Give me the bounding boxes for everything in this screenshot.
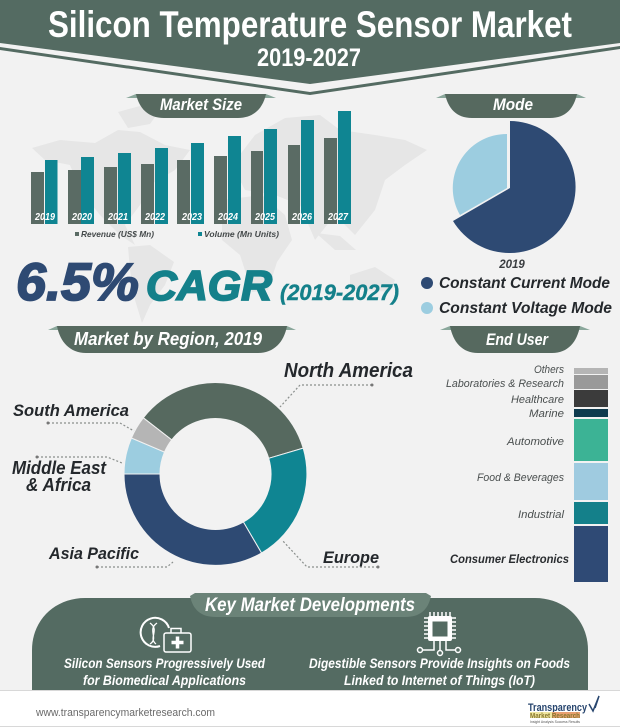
logo: Market Research: [530, 713, 580, 720]
icon: DNA and medical kit: [141, 618, 191, 652]
label: North America: [280, 360, 413, 407]
labels: end user: Consumer Electronics: [450, 552, 569, 566]
labels: end user: Automotive: [506, 436, 564, 448]
logo: Transparency: [528, 702, 588, 714]
labels: end user: Laboratories & Research: [446, 378, 564, 390]
pie chart: mode: [453, 121, 576, 271]
bar chart: market size: 2027: [327, 212, 348, 223]
legend: mode: Constant Current Mode: [439, 275, 610, 292]
development text: biomedical: [64, 655, 265, 688]
donut chart: market by region: [124, 383, 307, 565]
heading: Market by Region: [48, 326, 296, 353]
heading: Mode: Mode: [493, 95, 533, 114]
labels: end user: Healthcare: [511, 394, 564, 406]
legend: market size: Revenue (US$ Mn): [81, 229, 154, 239]
bar chart: market size: 2026: [291, 212, 312, 223]
development text: biomedical: for Biomedical Applications: [83, 672, 246, 688]
labels: end user: Food & Beverages: [477, 472, 564, 484]
labels: end user: Industrial: [518, 509, 565, 521]
heading: Market Size: Market Size: [160, 95, 242, 114]
bar chart: market size: 2023: [181, 212, 202, 223]
logo: [528, 696, 599, 724]
label: South America: South America: [13, 401, 129, 420]
label: Asia Pacific: [48, 544, 173, 568]
legend: market size: [75, 229, 279, 239]
development text: biomedical: Silicon Sensors Progressively Used: [64, 655, 265, 671]
bar chart: market size: 2025: [254, 212, 275, 223]
bar chart: market size: 2024: [217, 212, 238, 223]
world map background: [32, 106, 427, 323]
stacked bar: end user: [574, 368, 608, 582]
bar chart: market size: 2019: [34, 212, 55, 223]
label: Europe: [282, 540, 380, 568]
label: Middle East & Africa: Middle East: [12, 458, 107, 478]
heading: Market by Region: Market by Region, 2019: [74, 329, 262, 349]
heading: Mode: [436, 94, 586, 118]
heading: End User: [440, 326, 590, 353]
panel: key market developments: [32, 593, 588, 690]
legend: mode: [421, 275, 612, 317]
development text: digestible sensors: [309, 655, 570, 688]
logo: Insight Analysis Success Results: [530, 720, 580, 724]
CAGR callout: 6.5%: [16, 253, 139, 312]
label: Asia Pacific: Asia Pacific: [48, 544, 140, 563]
bar chart: market size: [31, 111, 351, 224]
label: Middle East & Africa: & Africa: [26, 475, 91, 495]
icon: microchip: [418, 612, 460, 656]
label: South America: [13, 401, 134, 431]
heading: Market Size: [126, 94, 276, 118]
heading: End User: End User: [486, 330, 549, 349]
labels: end user: [446, 364, 569, 566]
heading: key market developments: Key Market Developments: [205, 595, 415, 616]
pie chart: mode: 2019: [498, 259, 525, 271]
labels: end user: Marine: [529, 408, 564, 420]
legend: market size: Volume (Mn Units): [204, 229, 279, 239]
website url: www.transparencymarketresearch.com: [35, 707, 215, 719]
CAGR callout: (2019-2027): [280, 280, 399, 305]
labels: end user: Others: [534, 364, 564, 376]
bar chart: market size: 2022: [144, 212, 165, 223]
footer: [0, 690, 620, 728]
CAGR callout: [16, 253, 399, 312]
CAGR callout: CAGR: [146, 262, 273, 309]
label: Middle East & Africa: [12, 456, 122, 495]
label: North America: North America: [284, 360, 413, 382]
development text: digestible sensors: Digestible Sensors Provide Insights on Foods: [309, 655, 570, 671]
header banner: [0, 0, 620, 95]
development text: digestible sensors: Linked to Internet of Things (IoT): [344, 672, 535, 688]
bar chart: market size: 2021: [107, 212, 128, 223]
legend: mode: Constant Voltage Mode: [439, 300, 612, 317]
bar chart: market size: 2020: [71, 212, 92, 223]
subtitle years: 2019-2027: [257, 44, 361, 72]
label: Europe: Europe: [323, 548, 379, 567]
